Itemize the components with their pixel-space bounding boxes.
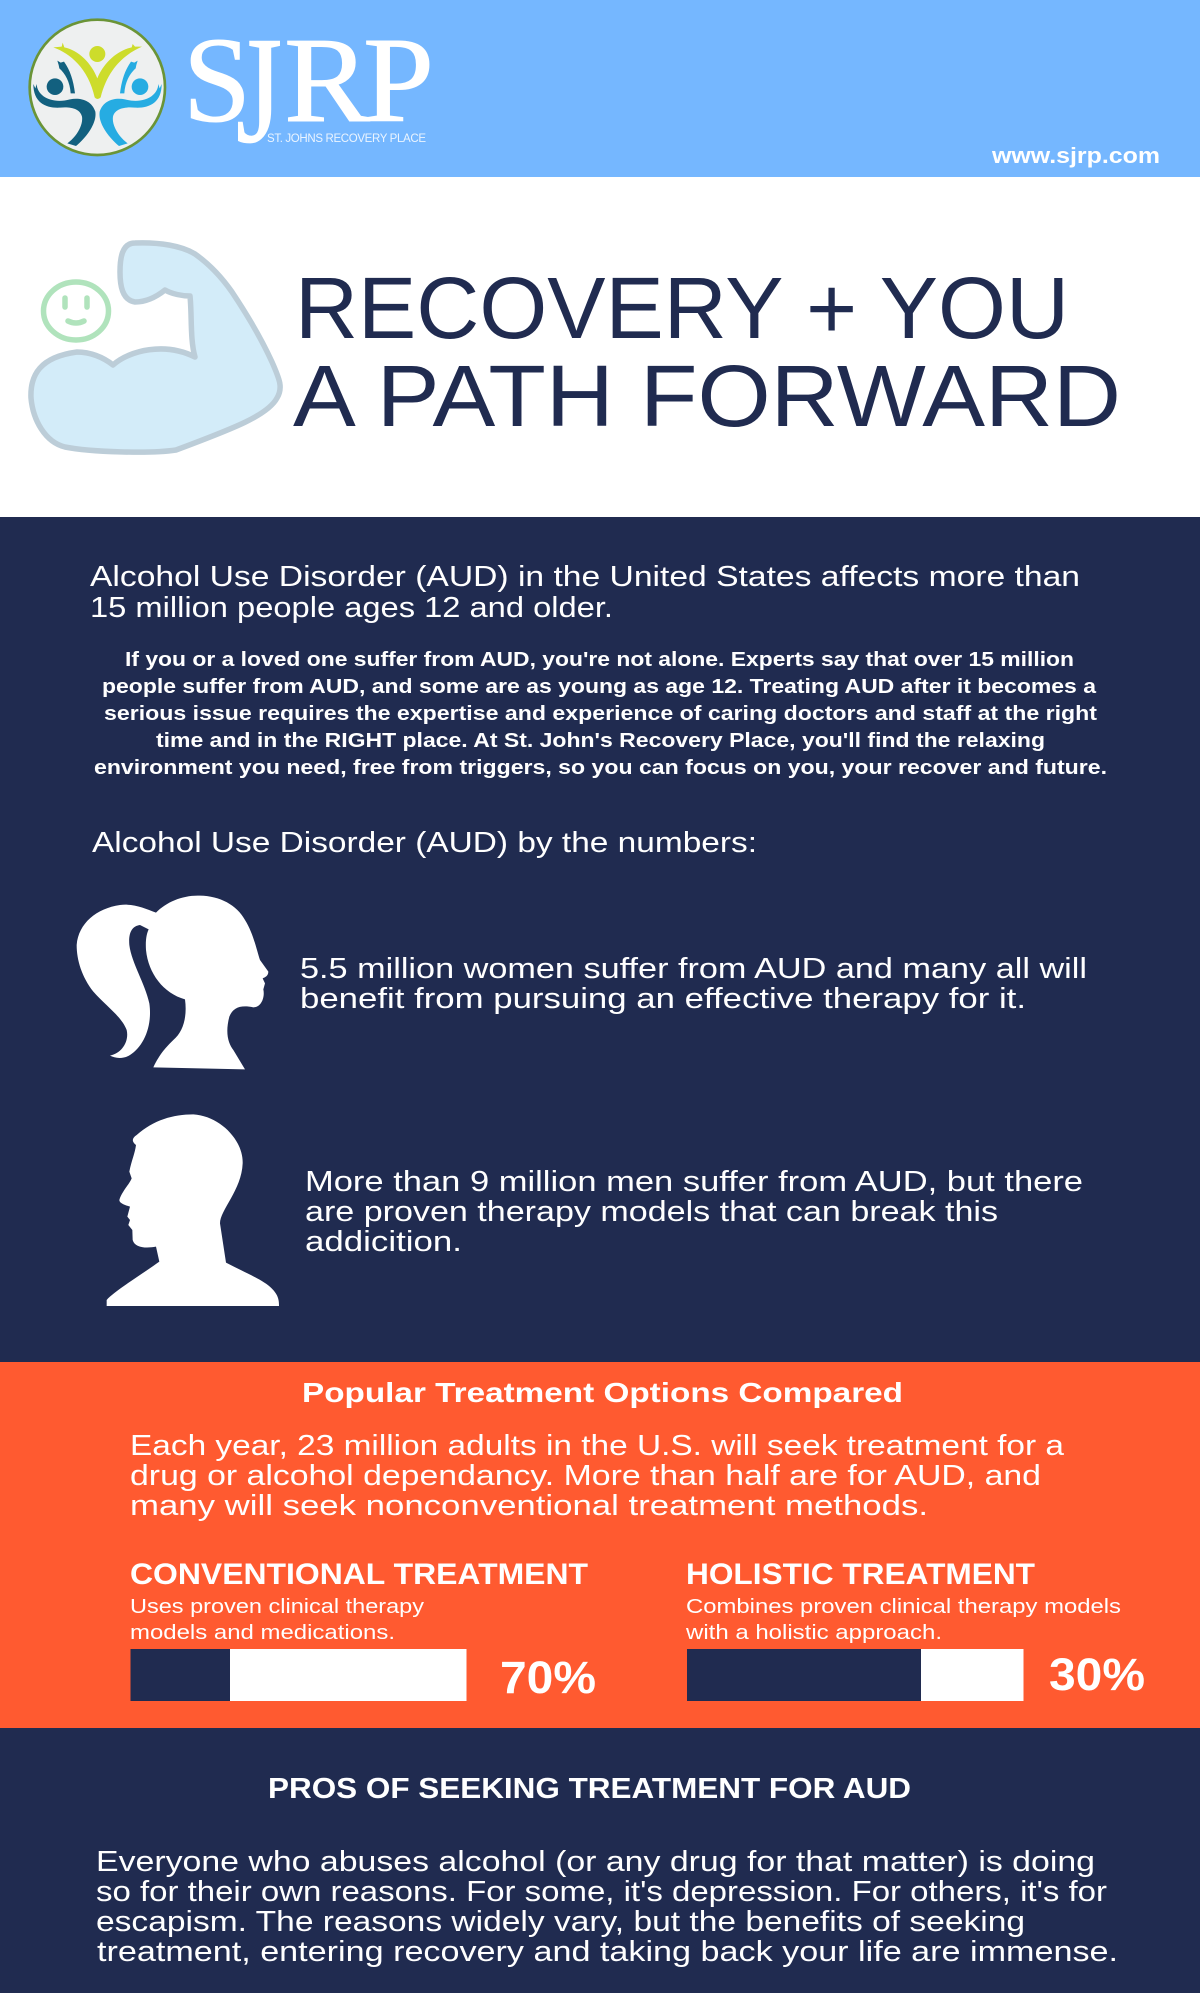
intro heading [90,561,1080,624]
intro paragraph [94,648,1107,779]
conventional treatment: models and medications. [130,1621,395,1644]
treatment heading: Popular Treatment Options Compared [302,1377,903,1408]
pros paragraph: Everyone who abuses alcohol (or any drug for that matter) is doing [96,1846,1095,1878]
logo emblem [30,20,165,155]
header band [0,0,1200,177]
title text [293,260,1121,445]
pros paragraph: so for their own reasons. For some, it's depression. For others, it's for [96,1876,1107,1908]
intro paragraph: serious issue requires the expertise and experience of caring doctors and staff at the right [104,702,1097,725]
intro paragraph: time and in the RIGHT place. At St. John's Recovery Place, you'll find the relaxing [156,729,1045,752]
pros paragraph [96,1846,1118,1968]
icon: woman silhouette [77,896,268,1069]
value: 70%: 70% [500,1652,596,1703]
men statistic: are proven therapy models that can break this [305,1196,998,1228]
holistic treatment [685,1558,1145,1701]
logo wordmark: P [363,13,434,148]
treatment intro: Each year, 23 million adults in the U.S. will seek treatment for a [130,1430,1065,1462]
logo wordmark: R [284,13,371,148]
title panel [0,177,1200,517]
conventional treatment [130,1558,596,1703]
bar: conventional [130,1649,466,1701]
panel: treatment options [0,1362,1200,1728]
website url: www.sjrp.com [991,143,1160,168]
holistic treatment: with a holistic approach. [685,1621,942,1644]
pros heading: PROS OF SEEKING TREATMENT FOR AUD [268,1773,911,1805]
logo wordmark: ST. JOHNS RECOVERY PLACE [267,133,426,145]
intro paragraph: people suffer from AUD, and some are as young as age 12. Treating AUD after it becomes a [102,675,1097,698]
treatment intro: drug or alcohol dependancy. More than half are for AUD, and [130,1460,1041,1492]
value: 30%: 30% [1049,1649,1145,1700]
numbers heading: Alcohol Use Disorder (AUD) by the numbers: [92,827,757,859]
men statistic: More than 9 million men suffer from AUD, but there [305,1166,1083,1198]
panel: pros of treatment [0,1728,1200,1993]
title text: A PATH FORWARD [293,348,1121,445]
icon: smiley face [44,282,108,340]
women statistic: 5.5 million women suffer from AUD and many all will [300,953,1087,985]
holistic treatment: Combines proven clinical therapy models [686,1595,1121,1618]
title text: RECOVERY + YOU [295,260,1069,357]
pros paragraph: escapism. The reasons widely vary, but the benefits of seeking [96,1906,1025,1938]
treatment intro: many will seek nonconventional treatment methods. [130,1490,928,1522]
logo wordmark: J [236,5,282,174]
women statistic: benefit from pursuing an effective therapy for it. [300,983,1026,1015]
panel: AUD by the numbers [0,517,1200,1362]
logo wordmark: S [183,13,251,148]
intro paragraph: environment you need, free from triggers, so you can focus on you, your recover and future. [94,756,1107,779]
men statistic: addicition. [305,1226,462,1258]
logo wordmark [183,5,434,174]
intro paragraph: If you or a loved one suffer from AUD, you're not alone. Experts say that over 15 million [125,648,1074,671]
intro heading: 15 million people ages 12 and older. [90,592,613,624]
conventional treatment: CONVENTIONAL TREATMENT [130,1558,588,1591]
bar: holistic [687,1649,1024,1701]
treatment intro [130,1430,1065,1522]
men statistic [305,1166,1083,1258]
icon: flexed arm [31,243,280,452]
conventional treatment: Uses proven clinical therapy [130,1595,425,1618]
pros paragraph: treatment, entering recovery and taking back your life are immense. [97,1936,1118,1968]
icon: man silhouette [107,1114,279,1306]
women statistic [300,953,1087,1015]
intro heading: Alcohol Use Disorder (AUD) in the United States affects more than [90,561,1080,593]
holistic treatment: HOLISTIC TREATMENT [686,1558,1035,1591]
